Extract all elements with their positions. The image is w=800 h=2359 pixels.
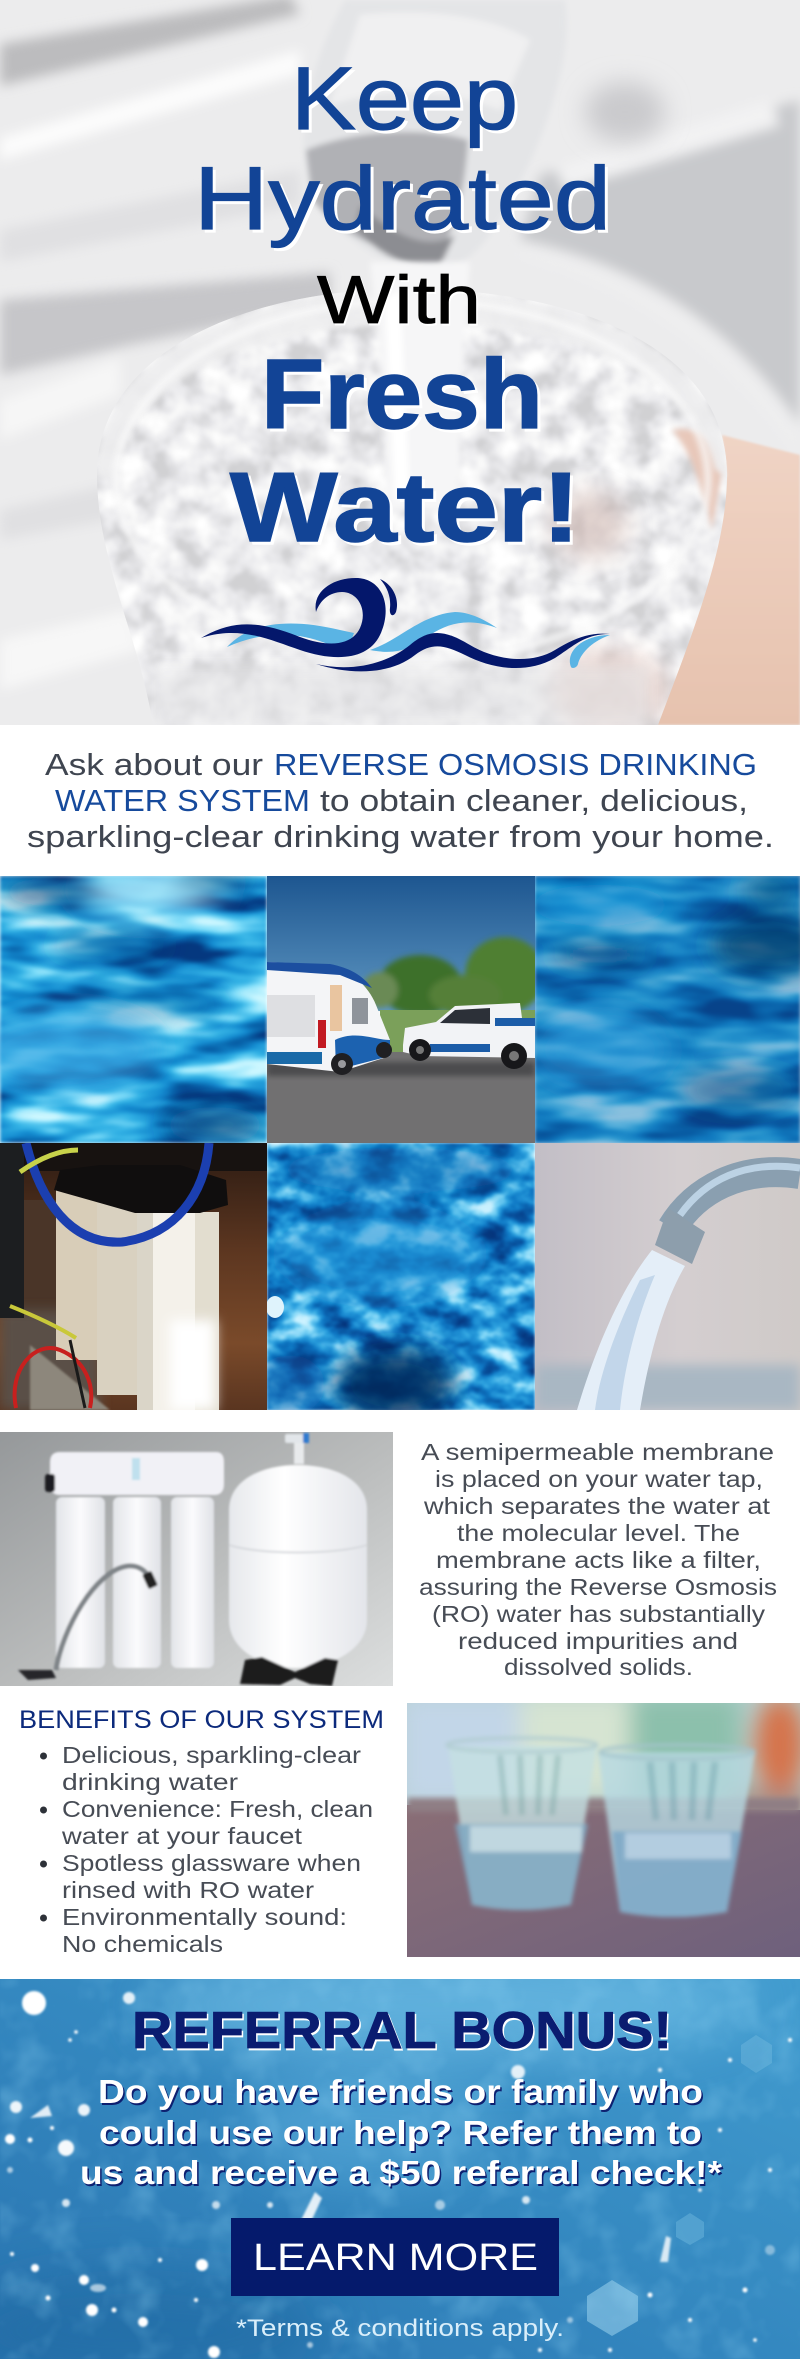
benefits heading: BENEFITS OF OUR SYSTEM [19, 1706, 384, 1734]
description text: dissolved solids. [504, 1654, 693, 1680]
benefits list: water at your faucet [61, 1823, 303, 1849]
glass [90, 280, 740, 730]
faucet [56, 1566, 150, 1670]
description text: which separates the water at [423, 1493, 771, 1519]
terms note: *Terms & conditions apply. [236, 2315, 564, 2342]
learn more button: LEARN MORE [253, 2237, 538, 2279]
photo: blue water 1 [0, 876, 267, 1143]
faucet [304, 0, 567, 270]
hero photo: water pouring into a glass [0, 0, 800, 725]
title line: Fresh: Fresh [261, 339, 543, 449]
description text: reduced impurities and [458, 1628, 738, 1654]
title [194, 48, 611, 562]
title line: Hydrated: Hydrated [194, 148, 611, 248]
benefits list: Delicious, sparkling-clear [62, 1742, 361, 1768]
left glass [447, 1738, 597, 1910]
photo: running faucet [535, 1143, 800, 1410]
hand behind the glass [655, 435, 800, 725]
icon: wave logo [201, 578, 610, 671]
photo: blue water 2 [535, 876, 800, 1143]
intro text: REVERSE OSMOSIS DRINKING [274, 747, 757, 782]
description text: membrane acts like a filter, [436, 1547, 761, 1573]
valve [294, 1440, 304, 1464]
description text: A semipermeable membrane [421, 1439, 774, 1465]
intro text: to obtain cleaner, delicious, [320, 783, 748, 818]
description text [419, 1439, 777, 1680]
benefits list: Convenience: Fresh, clean [62, 1796, 373, 1822]
photo grid [0, 868, 800, 1423]
referral text: us and receive a $50 referral check!* [80, 2154, 722, 2191]
title line: With: With [317, 262, 481, 338]
description text: is placed on your water tap, [435, 1466, 763, 1492]
right glass [598, 1745, 755, 1917]
photo: reverse osmosis system [0, 1432, 393, 1686]
intro text: WATER SYSTEM [55, 783, 310, 818]
benefits list: No chemicals [62, 1931, 223, 1957]
tank [229, 1465, 367, 1668]
filter head [50, 1452, 224, 1495]
referral text: Do you have friends or family who [98, 2073, 703, 2110]
benefits list: rinsed with RO water [62, 1877, 314, 1903]
referral text: could use our help? Refer them to [99, 2114, 702, 2151]
intro text: sparkling-clear drinking water from your home. [27, 819, 774, 854]
intro text: Ask about our [45, 747, 263, 782]
description text: assuring the Reverse Osmosis [419, 1574, 777, 1600]
learn more button [231, 2218, 559, 2296]
van [267, 962, 390, 1072]
sparkling water background [0, 1979, 800, 2359]
title line: Water!: Water! [230, 452, 580, 562]
photo: two glasses of water [407, 1703, 800, 1957]
title line: Keep: Keep [291, 48, 518, 148]
tank stand [240, 1657, 338, 1686]
referral text [80, 2073, 722, 2191]
intro text [27, 747, 774, 854]
benefits list: Environmentally sound: [62, 1904, 347, 1930]
description text: (RO) water has substantially [432, 1601, 766, 1627]
description text: the molecular level. The [457, 1520, 740, 1546]
water stream [370, 262, 470, 510]
referral heading: REFERRAL BONUS! [132, 2002, 672, 2060]
photo: blue water 3 [267, 1143, 535, 1410]
photo: service van and truck [267, 876, 535, 1143]
tubes [56, 1497, 105, 1668]
truck [403, 1003, 535, 1058]
hexagon sparkles [587, 2280, 638, 2336]
benefits list: drinking water [62, 1769, 238, 1795]
panel: referral bonus [0, 1950, 800, 2359]
benefits list: Spotless glassware when [62, 1850, 361, 1876]
photo: filter cartridges under sink [0, 1143, 267, 1410]
benefits list [40, 1742, 373, 1957]
